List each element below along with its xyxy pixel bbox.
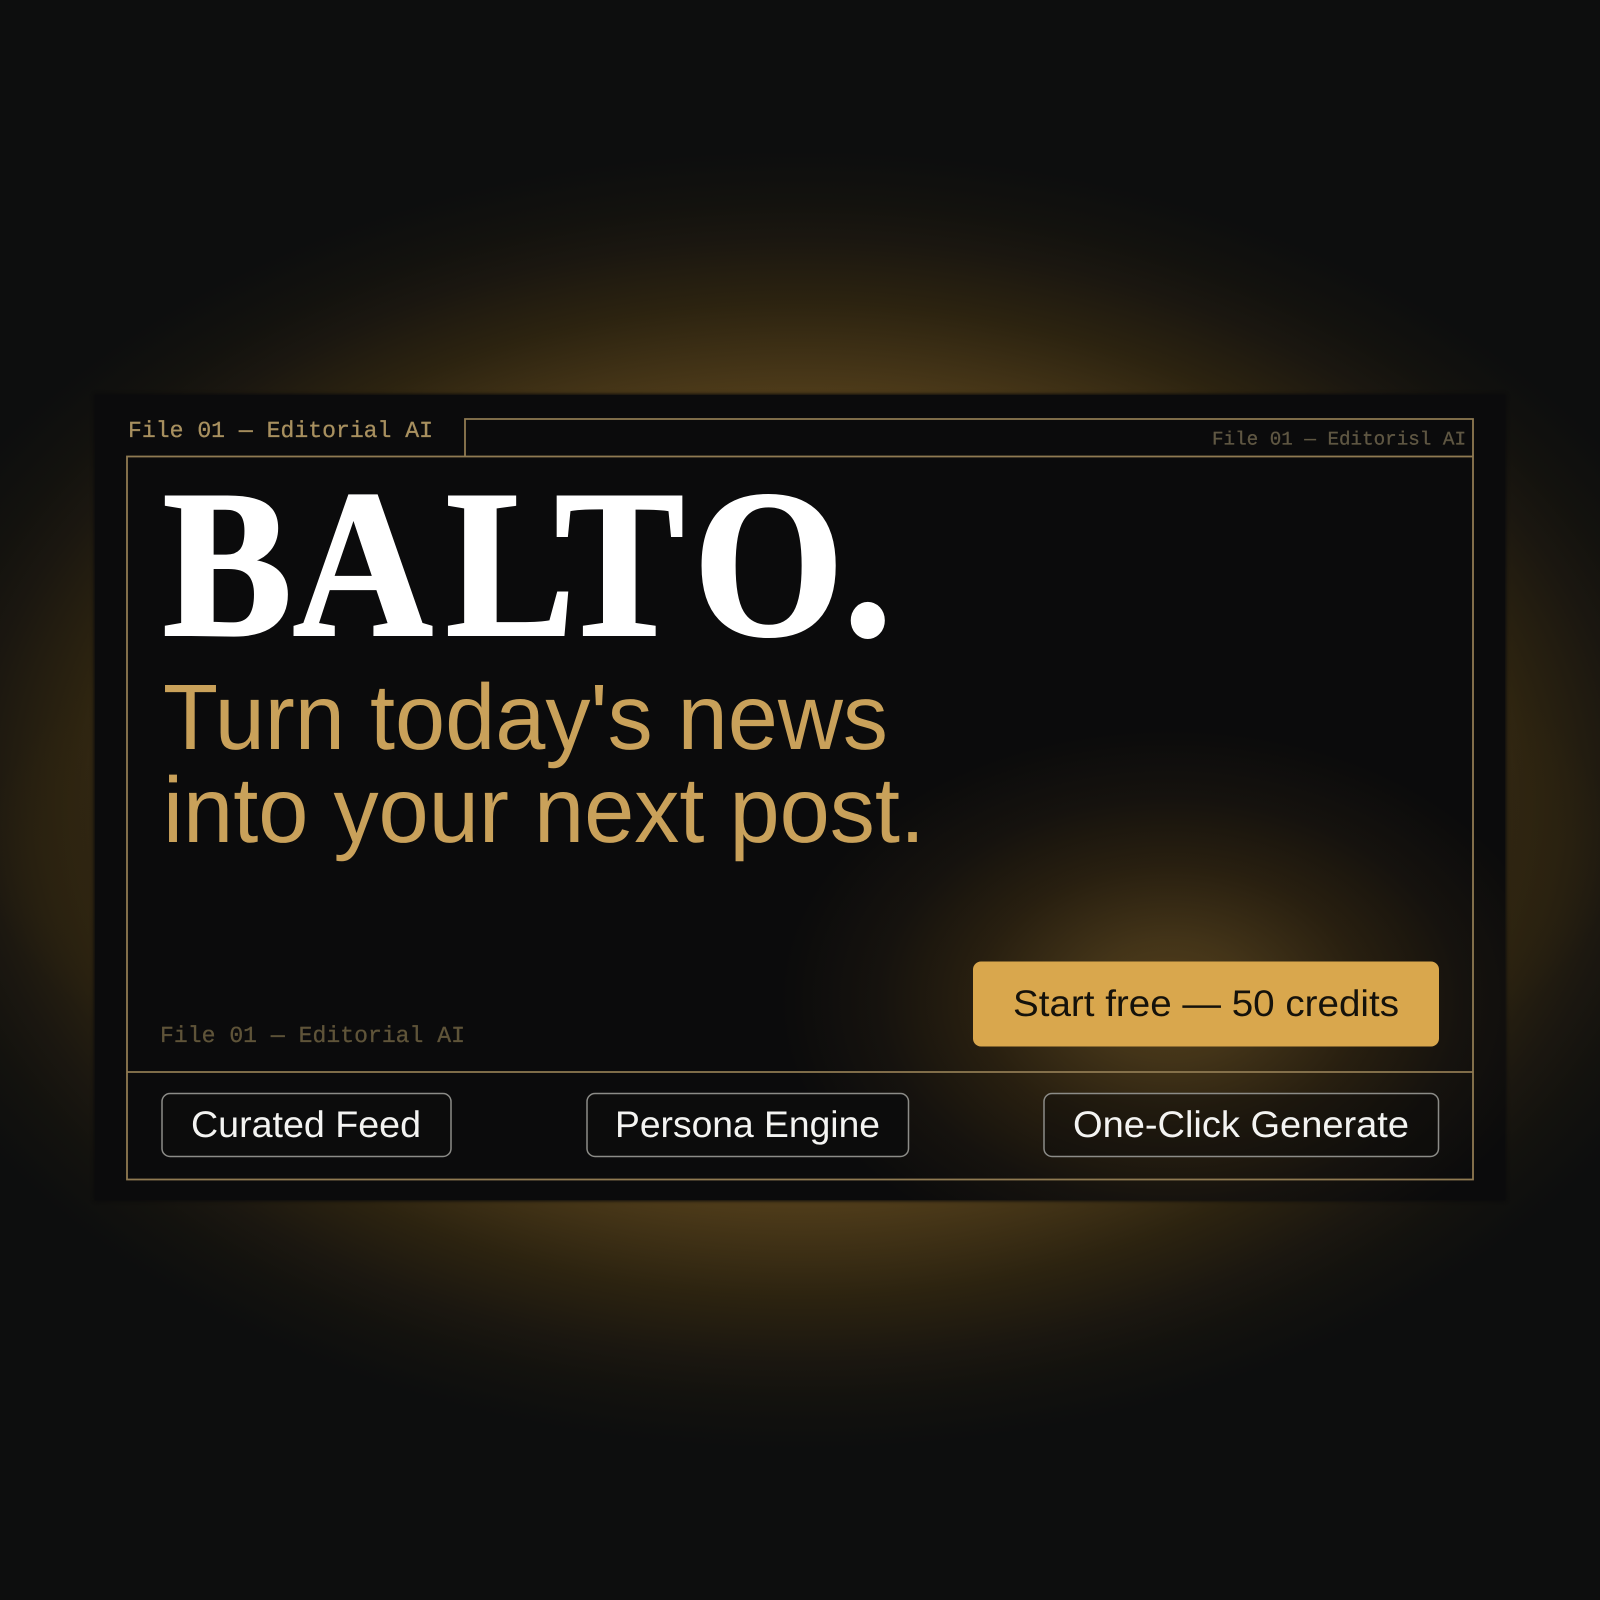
label: file tag top right: File 01 — Editorisl AI: [1212, 428, 1466, 450]
tagline: into your next post.: [163, 758, 925, 862]
tagline: [163, 665, 925, 862]
frame: outer gold border with tab and divider: [127, 419, 1473, 1180]
chip: persona engine: [587, 1094, 908, 1156]
card glow behind call to action: [95, 395, 1505, 1200]
chip: one-click generate: One-Click Generate: [1073, 1104, 1409, 1145]
title: BALTO.: [163, 448, 892, 680]
tagline: Turn today's news: [163, 665, 888, 769]
label: file tag bottom left: File 01 — Editorial AI: [160, 1023, 465, 1049]
label: file tag top left: File 01 — Editorial AI: [128, 418, 433, 444]
chip: curated feed: Curated Feed: [191, 1104, 421, 1145]
panel: dark card: [95, 395, 1505, 1200]
chip: one-click generate: [1044, 1094, 1438, 1156]
button: start free: [973, 962, 1439, 1046]
button: start free: Start free — 50 credits: [1013, 983, 1399, 1024]
chip: persona engine: Persona Engine: [615, 1104, 880, 1145]
chip: curated feed: [162, 1094, 451, 1156]
